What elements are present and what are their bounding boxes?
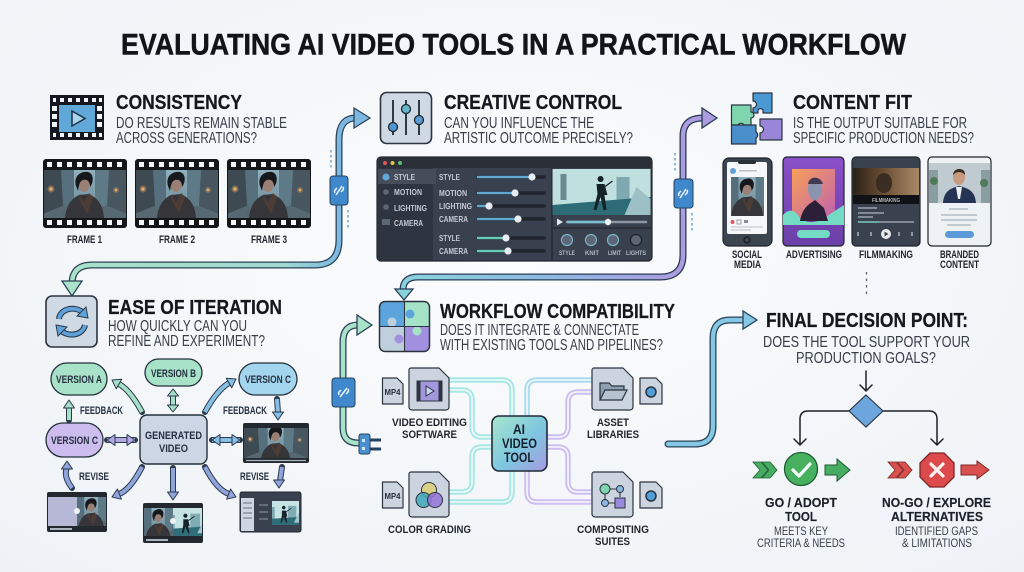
icon: red chevrons [888,462,912,478]
label: video editing software [392,417,467,441]
question text [108,318,265,350]
heading: content fit: CONTENT FIT [793,92,912,114]
question text: IS THE OUTPUT SUITABLE FOR [793,115,967,132]
question text: DOES IT INTEGRATE & CONNECTATE [440,322,639,339]
icon: film strip with play button [50,95,104,140]
heading: final decision point: FINAL DECISION POINT: [766,310,968,332]
label: compositing suites: SUITES [595,536,630,548]
label: compositing suites: COMPOSITING [577,524,649,536]
card: branded content [928,157,991,246]
icon: red arrow [961,461,989,479]
central node: AI video tool: TOOL [504,449,534,465]
label: color grading: COLOR GRADING [388,524,471,536]
file: MP4 top [382,378,403,404]
question text [116,115,287,147]
icon: green arrow [825,459,850,481]
question text: HOW QUICKLY CAN YOU [108,318,247,335]
arrow: workflow to final decision [668,311,757,444]
question text: ACROSS GENERATIONS? [116,130,257,147]
panel: final decision point [753,310,991,550]
sidebar menu: MOTION [394,187,422,197]
file: MP4 top: MP4 [384,387,401,397]
icon: green chevrons [753,462,777,478]
question text [793,115,974,147]
iteration labels: FEEDBACK [223,405,267,417]
iteration arrows [62,378,284,500]
outcome: go: MEETS KEY [774,526,828,538]
panel: content fit [713,92,991,296]
thumbnail: video player [243,423,309,463]
card labels: MEDIA [734,259,761,271]
slider labels: CAMERA [439,214,468,224]
card: filmmaking [852,157,920,246]
node: version C purple [46,423,103,457]
card labels: FILMMAKING [859,249,913,261]
central node: AI video tool: AI [513,421,525,437]
sidebar menu: LIGHTING [394,203,427,213]
dials: LIMIT [608,250,621,257]
iteration labels: FEEDBACK [80,405,123,417]
panel: ease of iteration [46,296,309,543]
slider labels [439,172,472,256]
card labels: CONTENT [940,259,979,271]
film frame 3 [227,159,311,228]
frame labels [67,234,287,246]
question text: REFINE AND EXPERIMENT? [108,333,265,350]
heading: ease of iteration: EASE OF ITERATION [108,297,282,319]
file: MP4 bottom: MP4 [384,491,401,501]
slider labels: STYLE [439,172,460,182]
slider labels: MOTION [439,188,467,198]
frame labels: FRAME 1 [67,234,102,246]
outcome: go: TOOL [785,510,817,524]
thumbnail: split comparison [47,492,119,532]
card: advertising [783,157,844,246]
icon: no-go stop sign [920,453,954,487]
icon: decision diamond [849,395,883,427]
outcome: no-go [882,496,991,550]
dials: KNIT [585,250,599,257]
file: MP4 bottom [382,482,403,508]
question text: CAN YOU INFLUENCE THE [444,115,594,132]
heading: consistency: CONSISTENCY [116,92,243,114]
arrow: consistency to creative control and ease of iteration [62,108,370,296]
node: version C blue [239,363,297,395]
question text: PRODUCTION GOALS? [796,350,936,367]
file: compositing suites [592,472,633,517]
file: video editing software [409,368,449,410]
panel: creative control [377,92,652,261]
heading: workflow compatibility: WORKFLOW COMPATIBILITY [440,301,676,323]
node: version B: VERSION B [151,368,196,380]
dials [559,234,647,257]
label: video editing software: SOFTWARE [402,429,457,441]
sidebar menu: STYLE [394,172,415,182]
label: asset libraries: LIBRARIES [587,429,639,441]
question text: WITH EXISTING TOOLS AND PIPELINES? [440,337,663,354]
central node: AI video tool [492,416,547,471]
question text [444,115,633,147]
icon: four-piece puzzle [380,302,430,352]
node: generated video: VIDEO [159,443,188,455]
node: version C purple: VERSION C [51,435,98,447]
film frame 2 [135,159,219,228]
thumbnail: control panel [240,492,304,532]
question text [763,334,970,367]
panel: workflow compatibility [380,301,676,548]
film frame 1 [43,159,127,228]
decision flow lines [794,371,943,445]
label: asset libraries [587,417,639,441]
icon: refresh arrows [46,296,97,347]
card labels: SOCIAL [732,249,762,261]
label: asset libraries: ASSET [597,417,629,429]
slider labels: LIGHTING [439,201,472,211]
thumbnail: side-by-side [132,503,208,543]
card: social media phone [713,158,782,246]
question text [440,322,663,354]
preview image [552,169,650,215]
panel: consistency [43,92,311,246]
outcome: go: GO / ADOPT [765,496,837,510]
file: quicktime top [640,378,662,404]
dials: STYLE [559,250,576,257]
label: compositing suites [577,524,649,548]
node: version A [51,363,107,395]
heading: creative control: CREATIVE CONTROL [444,92,622,114]
frame labels: FRAME 3 [251,234,287,246]
outcome: no-go: NO-GO / EXPLORE [882,496,991,510]
node: version A: VERSION A [56,374,102,386]
slider labels: CAMERA [439,246,468,256]
icon: puzzle pieces [732,93,782,144]
integration connectors [449,380,592,502]
title: EVALUATING AI VIDEO TOOLS IN A PRACTICAL WORKFLOW [121,28,907,62]
card labels: ADVERTISING [786,249,842,261]
sidebar menu: CAMERA [394,218,423,228]
arrow: workflow compatibility to content fit [395,108,717,300]
card labels [732,249,979,271]
label: video editing software: VIDEO EDITING [392,417,467,429]
sliders [478,173,544,255]
slider labels: STYLE [439,233,460,243]
node: version B [145,359,202,386]
outcome: go: CRITERIA & NEEDS [757,538,845,550]
node: version C blue: VERSION C [245,374,291,386]
arrow: plug to workflow compatibility [332,315,381,454]
outcome: no-go: ALTERNATIVES [891,510,983,524]
iteration labels [79,405,269,483]
outcome: no-go: & LIMITATIONS [902,538,972,550]
card: filmmaking: FILMMAKING [872,198,900,204]
icon: sliders [380,92,432,144]
playback bar [557,218,646,226]
iteration labels: REVISE [240,471,269,483]
central node: AI video tool: VIDEO [502,435,537,451]
card labels: BRANDED [940,249,979,261]
sidebar menu [394,172,427,228]
outcome: go [757,496,845,550]
node: generated video: GENERATED [145,430,202,442]
file: quicktime bottom [640,482,662,508]
software control panel [377,157,652,261]
question text: DOES THE TOOL SUPPORT YOUR [763,334,970,351]
file: asset libraries [592,368,633,410]
question text: DO RESULTS REMAIN STABLE [116,115,287,132]
dials: LIGHTS [626,250,647,257]
outcome: no-go: IDENTIFIED GAPS [895,526,978,538]
icon: go check mark [784,452,818,486]
file: color grading [409,472,449,517]
node: generated video [140,415,207,464]
question text: ARTISTIC OUTCOME PRECISELY? [444,130,633,147]
iteration labels: REVISE [79,471,109,483]
frame labels: FRAME 2 [159,234,195,246]
